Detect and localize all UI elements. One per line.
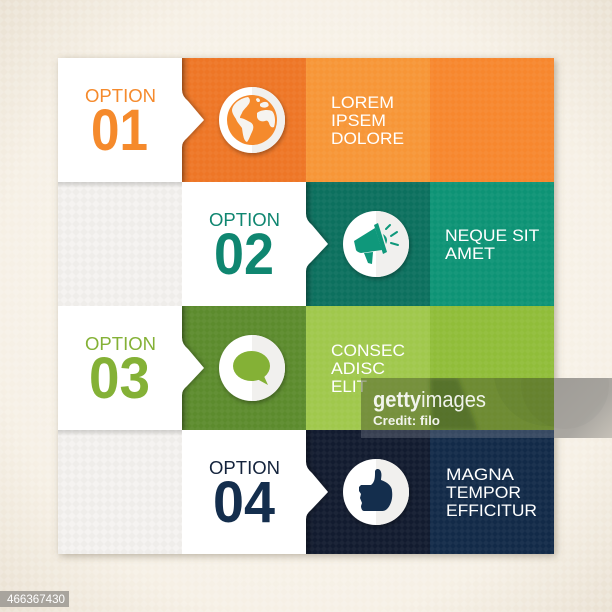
label: lorem: DOLORE bbox=[331, 130, 404, 148]
heading: option 4: OPTION bbox=[209, 458, 280, 478]
watermark: getty images bbox=[361, 378, 612, 438]
panel: empty cell row 4 bbox=[58, 430, 182, 554]
label: lorem: IPSEM bbox=[331, 112, 386, 130]
label: consec: ELIT bbox=[331, 378, 367, 396]
icon: globe bbox=[219, 87, 285, 153]
label: consec: ADISC bbox=[331, 360, 385, 378]
icon: thumbs up bbox=[343, 459, 409, 525]
label: consec: CONSEC bbox=[331, 342, 405, 360]
number: 04: 04 bbox=[213, 470, 275, 535]
panel: option 3 bbox=[58, 306, 554, 436]
panel: option 2 bbox=[182, 182, 554, 306]
watermark logo: gettyimages bbox=[373, 387, 486, 412]
label: lorem: LOREM bbox=[331, 94, 394, 112]
icon: megaphone bbox=[343, 211, 409, 277]
label: magna: TEMPOR bbox=[446, 484, 521, 502]
label: neque: NEQUE SIT bbox=[445, 227, 539, 245]
heading: option 2: OPTION bbox=[209, 210, 280, 230]
panel: option 1 bbox=[58, 58, 554, 188]
number: 01: 01 bbox=[91, 98, 148, 163]
heading: option 1: OPTION bbox=[85, 86, 156, 106]
stock id tag: 466367430 bbox=[7, 594, 65, 606]
label: magna: EFFICITUR bbox=[446, 502, 537, 520]
watermark credit: Credit: filo bbox=[373, 414, 440, 428]
panel: option 4 bbox=[182, 430, 554, 554]
heading: option 3: OPTION bbox=[85, 334, 156, 354]
label: neque: AMET bbox=[445, 245, 495, 263]
card base bbox=[58, 58, 554, 554]
panel: empty cell row 2 bbox=[58, 182, 182, 306]
stock id tag bbox=[0, 591, 69, 607]
label: magna: MAGNA bbox=[446, 466, 514, 484]
icon: speech bubble bbox=[219, 335, 285, 401]
number: 02: 02 bbox=[214, 222, 274, 287]
number: 03: 03 bbox=[89, 346, 150, 411]
